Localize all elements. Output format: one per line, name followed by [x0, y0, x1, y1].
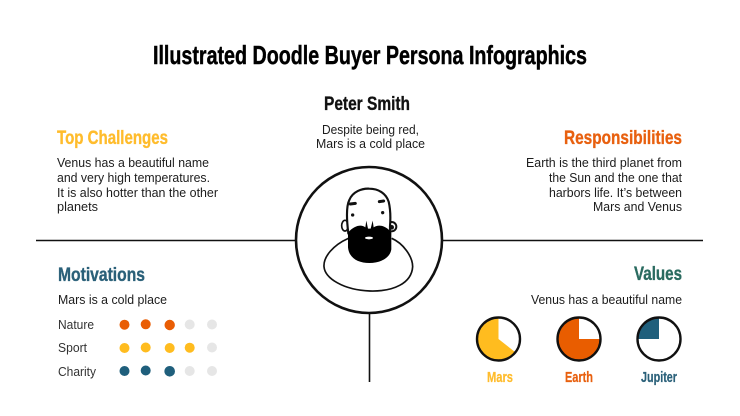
illustration: eyes and brows	[350, 201, 384, 217]
panel: motivations: Mars is a cold place	[58, 292, 167, 307]
panel: responsibilities	[526, 127, 682, 214]
rating row: charity: Charity	[58, 364, 96, 379]
panel: top challenges: Venus has a beautiful name	[57, 155, 209, 170]
rating row: nature	[58, 317, 217, 332]
rating row: sport	[58, 340, 217, 355]
panel: values: Venus has a beautiful name	[531, 292, 682, 307]
rating row: nature: Nature	[58, 317, 94, 332]
pie chart: mars	[477, 318, 520, 386]
persona heading and description: Mars is a cold place	[316, 136, 425, 151]
panel: values: Values	[634, 263, 682, 285]
rating row: sport: Sport	[58, 340, 87, 355]
pie chart: jupiter: Jupiter	[641, 370, 677, 386]
panel: responsibilities: Mars and Venus	[593, 199, 682, 214]
pie chart: earth: Earth	[565, 370, 593, 386]
rating row: charity	[58, 364, 217, 379]
pie chart: jupiter	[638, 318, 680, 386]
panel: responsibilities: the Sun and the one that	[549, 170, 682, 185]
illustration: head	[347, 189, 390, 233]
illustration: ears	[342, 220, 396, 231]
persona heading and description: Peter Smith	[324, 93, 410, 115]
illustration: mouth	[365, 237, 373, 239]
portrait: bearded man in circle	[296, 167, 442, 313]
panel: motivations: Motivations	[58, 264, 145, 286]
pie chart: earth	[558, 318, 600, 386]
title: Illustrated Doodle Buyer Persona Infographics	[153, 40, 587, 70]
panel: top challenges: It is also hotter than the other	[57, 185, 219, 200]
panel: top challenges: and very high temperatures.	[57, 170, 210, 185]
persona heading and description	[316, 93, 425, 151]
panel: responsibilities: Responsibilities	[564, 127, 682, 149]
panel: top challenges: Top Challenges	[57, 127, 168, 149]
illustration: body outline	[324, 238, 413, 291]
illustration: beard	[348, 221, 391, 263]
panel: top challenges: planets	[57, 199, 98, 214]
panel: values	[477, 263, 682, 386]
panel: motivations	[58, 264, 217, 379]
pie chart: mars: Mars	[487, 370, 513, 386]
persona heading and description: Despite being red,	[322, 122, 419, 137]
panel: top challenges	[57, 127, 219, 214]
panel: responsibilities: Earth is the third planet from	[526, 155, 682, 170]
panel: responsibilities: harbors life. It’s between	[549, 185, 682, 200]
